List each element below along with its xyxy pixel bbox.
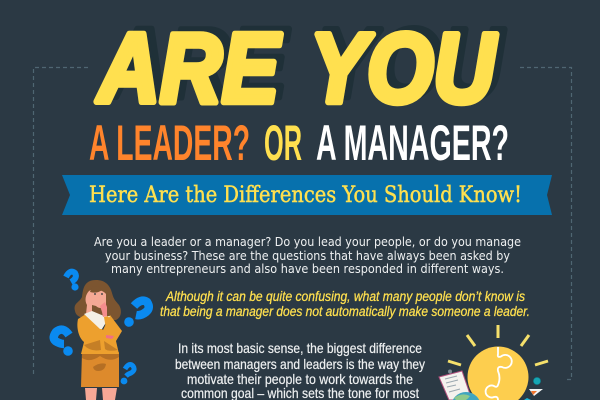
highlighted italic statement: that being a manager does not automatically make someone a leader. <box>160 304 530 319</box>
intro paragraph <box>94 234 521 276</box>
raised hand <box>98 316 121 337</box>
body paragraph: motivate their people to work towards the <box>187 371 413 387</box>
icon: clipboard <box>439 370 472 400</box>
icon: blue question marks <box>54 272 149 384</box>
icon: light bulb puzzle <box>448 325 548 400</box>
illustration: thinking woman <box>75 280 122 400</box>
title: ARE YOU: ARE <box>95 13 281 123</box>
hair <box>75 280 121 320</box>
subtitle: a leader or a manager: A LEADER? <box>89 114 250 171</box>
banner ribbon: Here Are the Differences You Should Know! <box>89 183 522 208</box>
intro paragraph: Are you a leader or a manager? Do you lead your people, or do you manage <box>94 234 521 249</box>
body paragraph: In its most basic sense, the biggest difference <box>178 340 422 356</box>
body paragraph <box>175 340 425 400</box>
title: ARE YOU: YOU <box>310 13 497 123</box>
legs <box>85 388 117 400</box>
collar <box>84 311 110 329</box>
jacket <box>77 314 122 354</box>
skirt <box>81 352 119 387</box>
title: ARE YOU <box>95 8 505 123</box>
icon: globe <box>451 392 481 400</box>
face <box>86 290 106 314</box>
subtitle: a leader or a manager: OR <box>264 114 302 171</box>
highlighted italic statement: Although it can be quite confusing, what many people don’t know is <box>165 289 525 304</box>
title: ARE YOU: ARE <box>103 8 289 118</box>
intro paragraph: many entrepreneurs and also have been responded in different ways. <box>111 261 504 276</box>
icon: teal dot <box>533 377 541 385</box>
body paragraph: between managers and leaders is the way they <box>175 356 425 372</box>
icon: paper plane <box>529 389 543 396</box>
icon: cyan shape <box>524 398 531 400</box>
title: ARE YOU: YOU <box>318 8 505 118</box>
banner ribbon <box>62 175 552 215</box>
highlighted italic statement <box>160 289 530 319</box>
subtitle: a leader or a manager <box>89 114 509 171</box>
intro paragraph: your business? These are the questions that have always been asked by <box>105 248 511 263</box>
